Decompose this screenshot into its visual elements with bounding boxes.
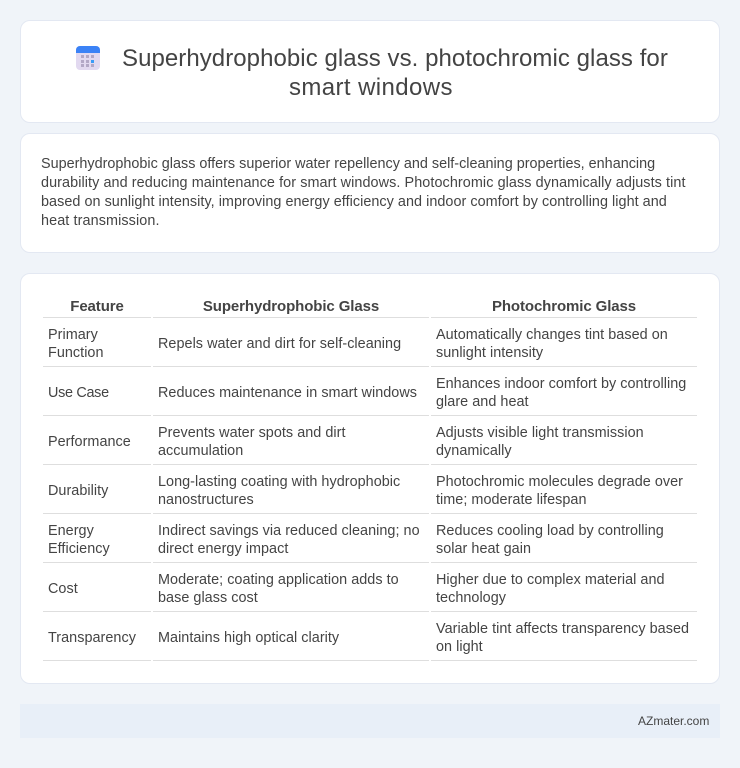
comparison table: Repels water and dirt for self-cleaning: [158, 336, 401, 352]
comparison table: Automatically changes tint based on: [436, 327, 668, 343]
title: [122, 45, 668, 101]
comparison table: Prevents water spots and dirt: [158, 425, 346, 441]
text block: summary: Superhydrophobic glass offers superior water repellency and self-cleaning properties, enhancing: [41, 156, 655, 172]
comparison table: Higher due to complex material and: [436, 572, 665, 588]
comparison table: Efficiency: [48, 541, 110, 557]
comparison table: Photochromic Glass: [492, 298, 636, 315]
comparison table: on light: [436, 639, 483, 655]
comparison table: Variable tint affects transparency based: [436, 621, 689, 637]
comparison table: accumulation: [158, 443, 243, 459]
title: smart windows: [289, 74, 453, 101]
text block: summary: [41, 156, 686, 229]
panel: comparison table card: [20, 273, 720, 684]
comparison table: Reduces maintenance in smart windows: [158, 385, 417, 401]
comparison table: sunlight intensity: [436, 345, 543, 361]
panel: summary card: [20, 133, 720, 253]
footer credit: AZmater.com: [638, 714, 709, 728]
comparison table: solar heat gain: [436, 541, 531, 557]
comparison table: Durability: [48, 483, 108, 499]
comparison table: Transparency: [48, 630, 136, 646]
comparison table: dynamically: [436, 443, 512, 459]
icon: calendar: [76, 46, 100, 70]
comparison table: nanostructures: [158, 492, 254, 508]
comparison table: Performance: [48, 434, 131, 450]
comparison table: Reduces cooling load by controlling: [436, 523, 664, 539]
comparison table: Long-lasting coating with hydrophobic: [158, 474, 400, 490]
comparison table: Moderate; coating application adds to: [158, 572, 399, 588]
comparison table: Energy: [48, 523, 94, 539]
comparison table: Enhances indoor comfort by controlling: [436, 376, 686, 392]
comparison table: Function: [48, 345, 104, 361]
comparison table: base glass cost: [158, 590, 258, 606]
comparison table: direct energy impact: [158, 541, 288, 557]
comparison table: Indirect savings via reduced cleaning; no: [158, 523, 420, 539]
title: Superhydrophobic glass vs. photochromic glass for: [122, 45, 668, 72]
comparison table: time; moderate lifespan: [436, 492, 586, 508]
comparison table: Adjusts visible light transmission: [436, 425, 644, 441]
comparison table: Primary: [48, 327, 98, 343]
comparison table: Superhydrophobic Glass: [203, 298, 379, 315]
comparison table: technology: [436, 590, 506, 606]
text block: summary: heat transmission.: [41, 213, 160, 229]
text block: summary: based on sunlight intensity, improving energy efficiency and indoor comfort by controlling light and: [41, 194, 667, 210]
panel: title card: [20, 20, 720, 123]
footer bar: [20, 704, 720, 738]
comparison table: Cost: [48, 581, 78, 597]
comparison table: glare and heat: [436, 394, 529, 410]
text block: summary: durability and reducing maintenance for smart windows. Photochromic glass dynamically adjusts tint: [41, 175, 686, 191]
comparison table: Use Case: [48, 385, 109, 401]
comparison table: Feature: [70, 298, 124, 315]
comparison table: Maintains high optical clarity: [158, 630, 339, 646]
comparison table: Photochromic molecules degrade over: [436, 474, 683, 490]
